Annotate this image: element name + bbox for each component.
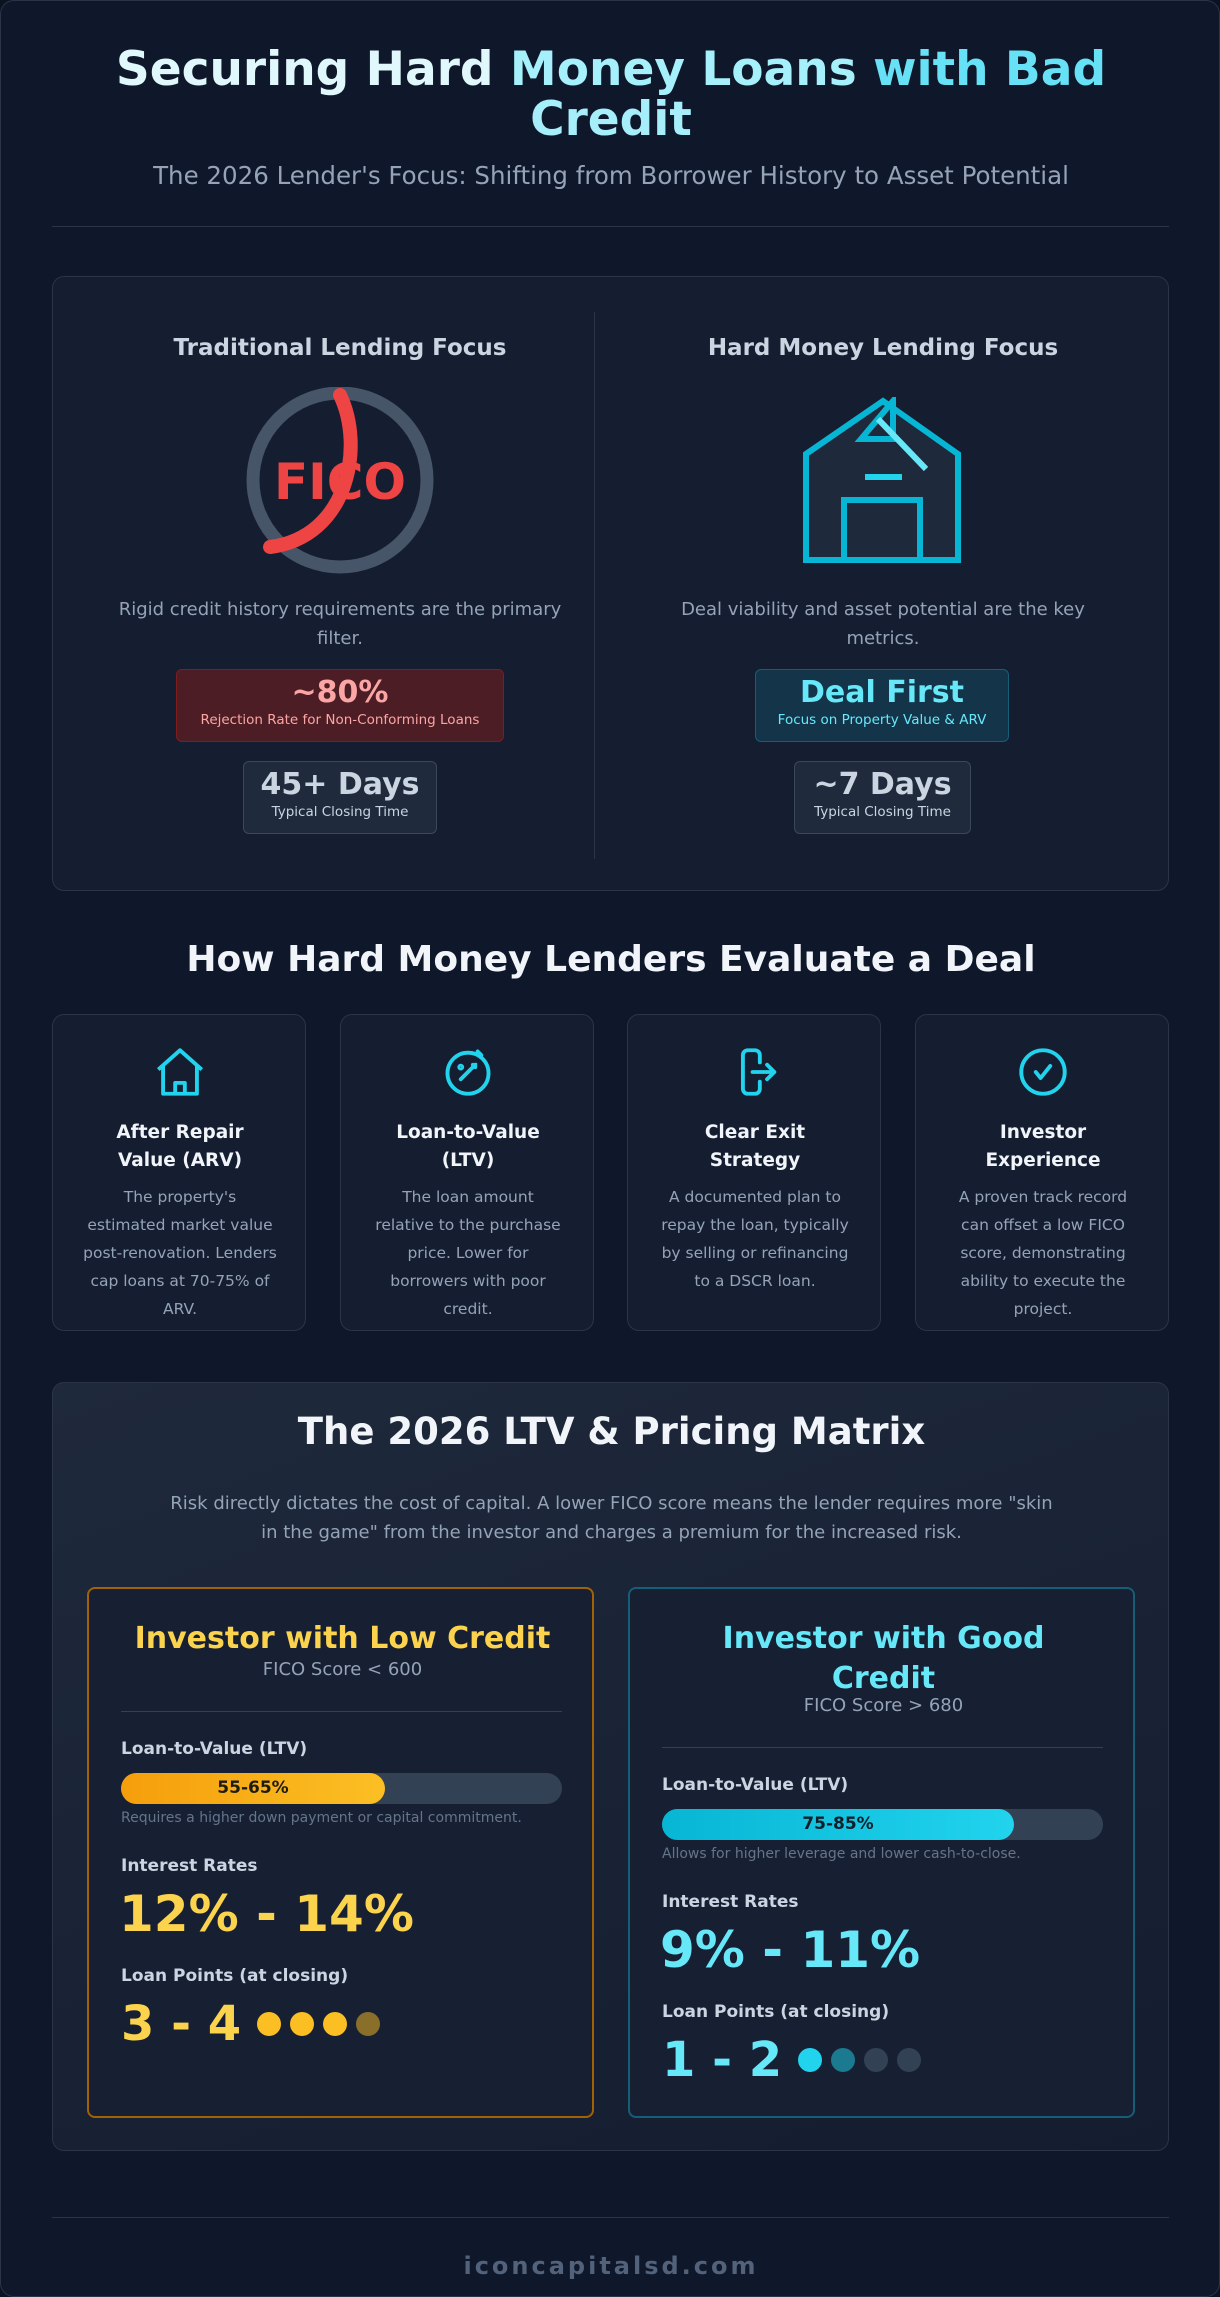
panel: LTV — [340, 1014, 594, 1331]
panel: good credit: Credit — [832, 1661, 935, 1696]
panel: low credit: Loan Points (at closing) — [121, 1966, 348, 1986]
subtitle: The 2026 Lender's Focus: Shifting from Borrower History to Asset Potential — [153, 161, 1069, 190]
bar: LTV 55-65%: 55-65% — [217, 1778, 289, 1798]
points: 3-4: 3 - 4 — [121, 1996, 241, 2052]
icon: check — [1019, 1048, 1067, 1096]
panel: LTV: The loan amount — [402, 1188, 534, 1206]
panel: experience: can offset a low FICO — [961, 1216, 1125, 1234]
title: Credit — [530, 92, 692, 147]
points: 3-4 — [121, 1996, 380, 2052]
panel: experience: ability to execute the — [961, 1272, 1125, 1290]
panel: exit: repay the loan, typically — [661, 1216, 849, 1234]
stat: 45 days — [243, 761, 437, 834]
text: matrix intro: in the game" from the investor and charges a premium for the increased risk. — [261, 1522, 962, 1543]
title — [116, 42, 1106, 147]
panel: low credit: FICO Score < 600 — [263, 1659, 422, 1680]
icon: FICO gauge — [246, 387, 434, 574]
panel: exit: by selling or refinancing — [662, 1244, 848, 1262]
panel: ARV — [52, 1014, 306, 1331]
text: matrix intro — [170, 1493, 1053, 1543]
panel: ARV: After Repair — [116, 1122, 244, 1143]
heading: matrix: The 2026 LTV & Pricing Matrix — [298, 1410, 925, 1453]
panel: low credit: Interest Rates — [121, 1856, 258, 1876]
heading: evaluate: How Hard Money Lenders Evaluate a Deal — [186, 939, 1036, 980]
panel: good credit: Loan-to-Value (LTV) — [662, 1775, 848, 1795]
panel: good credit: Allows for higher leverage and lower cash-to-close. — [662, 1846, 1021, 1862]
stat: deal first: Deal First — [800, 675, 964, 710]
panel: experience: project. — [1014, 1300, 1072, 1318]
panel: low credit: Loan-to-Value (LTV) — [121, 1739, 307, 1759]
points: 1-2: 1 - 2 — [662, 2032, 782, 2088]
stat: deal first — [755, 669, 1009, 742]
icon: gauge — [446, 1049, 490, 1096]
stat: 7 days: Typical Closing Time — [814, 804, 951, 820]
panel: LTV: borrowers with poor — [390, 1272, 546, 1290]
panel: exit: Clear Exit — [705, 1122, 805, 1143]
stat: deal first: Focus on Property Value & ARV — [778, 712, 986, 728]
panel: low credit: Investor with Low Credit — [135, 1621, 550, 1656]
panel: good credit: 9% - 11% — [660, 1921, 920, 1979]
bar: LTV 55-65% — [121, 1773, 562, 1804]
panel: good credit: Loan Points (at closing) — [662, 2002, 889, 2022]
text: traditional desc: Rigid credit history requirements are the primary filter. — [119, 599, 561, 649]
icon: exit — [741, 1048, 776, 1096]
stat: 80% rejection: Rejection Rate for Non-Conforming Loans — [201, 712, 479, 728]
panel: exit — [627, 1014, 881, 1331]
footer: iconcapitalsd.com — [463, 2252, 759, 2280]
panel: LTV: credit. — [443, 1300, 493, 1318]
panel: LTV: Loan-to-Value — [396, 1122, 540, 1143]
heading: traditional: Traditional Lending Focus — [174, 335, 506, 361]
text: matrix intro: Risk directly dictates the cost of capital. A lower FICO score means the lender requires more "skin — [170, 1493, 1053, 1514]
text: hard money desc: Deal viability and asset potential are the key metrics. — [681, 599, 1085, 649]
icon: house — [803, 397, 961, 563]
panel: ARV: estimated market value post-renovation. Lenders cap loans at 70-75% of ARV. — [83, 1216, 277, 1318]
panel: good credit — [628, 1587, 1135, 2118]
panel: good credit: Investor with Good — [723, 1621, 1044, 1656]
icon: FICO gauge: FICO — [274, 453, 406, 511]
panel: exit: Strategy — [710, 1150, 800, 1171]
panel: comparison — [52, 276, 1169, 891]
panel: experience: score, demonstrating — [960, 1244, 1126, 1262]
panel: low credit — [87, 1587, 594, 2118]
panel: low credit: Requires a higher down payment or capital commitment. — [121, 1810, 522, 1826]
panel: experience: Experience — [985, 1150, 1101, 1171]
panel: experience: A proven track record — [959, 1188, 1127, 1206]
heading: hard money: Hard Money Lending Focus — [708, 335, 1058, 361]
points: 1-2 — [662, 2032, 921, 2088]
bar: LTV 75-85% — [662, 1809, 1103, 1840]
panel: pricing matrix — [52, 1382, 1169, 2151]
panel: ARV: Value (ARV) — [118, 1150, 242, 1171]
stat: 80% rejection: ~80% — [292, 675, 388, 710]
panel: LTV: (LTV) — [442, 1150, 494, 1171]
stat: 45 days: Typical Closing Time — [272, 804, 408, 820]
panel: good credit: Interest Rates — [662, 1892, 798, 1912]
stat: 80% rejection — [176, 669, 504, 742]
panel: exit: to a DSCR loan. — [694, 1272, 816, 1290]
panel: LTV: relative to the purchase — [375, 1216, 561, 1234]
panel: exit: A documented plan to — [669, 1188, 841, 1206]
title: Securing Hard Money Loans with Bad — [116, 42, 1106, 97]
panel: low credit: 12% - 14% — [119, 1885, 414, 1943]
panel: experience — [915, 1014, 1169, 1331]
stat: 7 days: ~7 Days — [813, 767, 952, 802]
panel: LTV: price. Lower for — [407, 1244, 529, 1262]
panel: good credit: FICO Score > 680 — [804, 1695, 963, 1716]
stat: 45 days: 45+ Days — [261, 767, 419, 802]
panel: experience: Investor — [1000, 1122, 1086, 1143]
bar: LTV 75-85%: 75-85% — [802, 1814, 874, 1834]
panel: ARV: The property's — [124, 1188, 236, 1206]
stat: 7 days — [794, 761, 971, 834]
icon: house — [157, 1048, 203, 1096]
